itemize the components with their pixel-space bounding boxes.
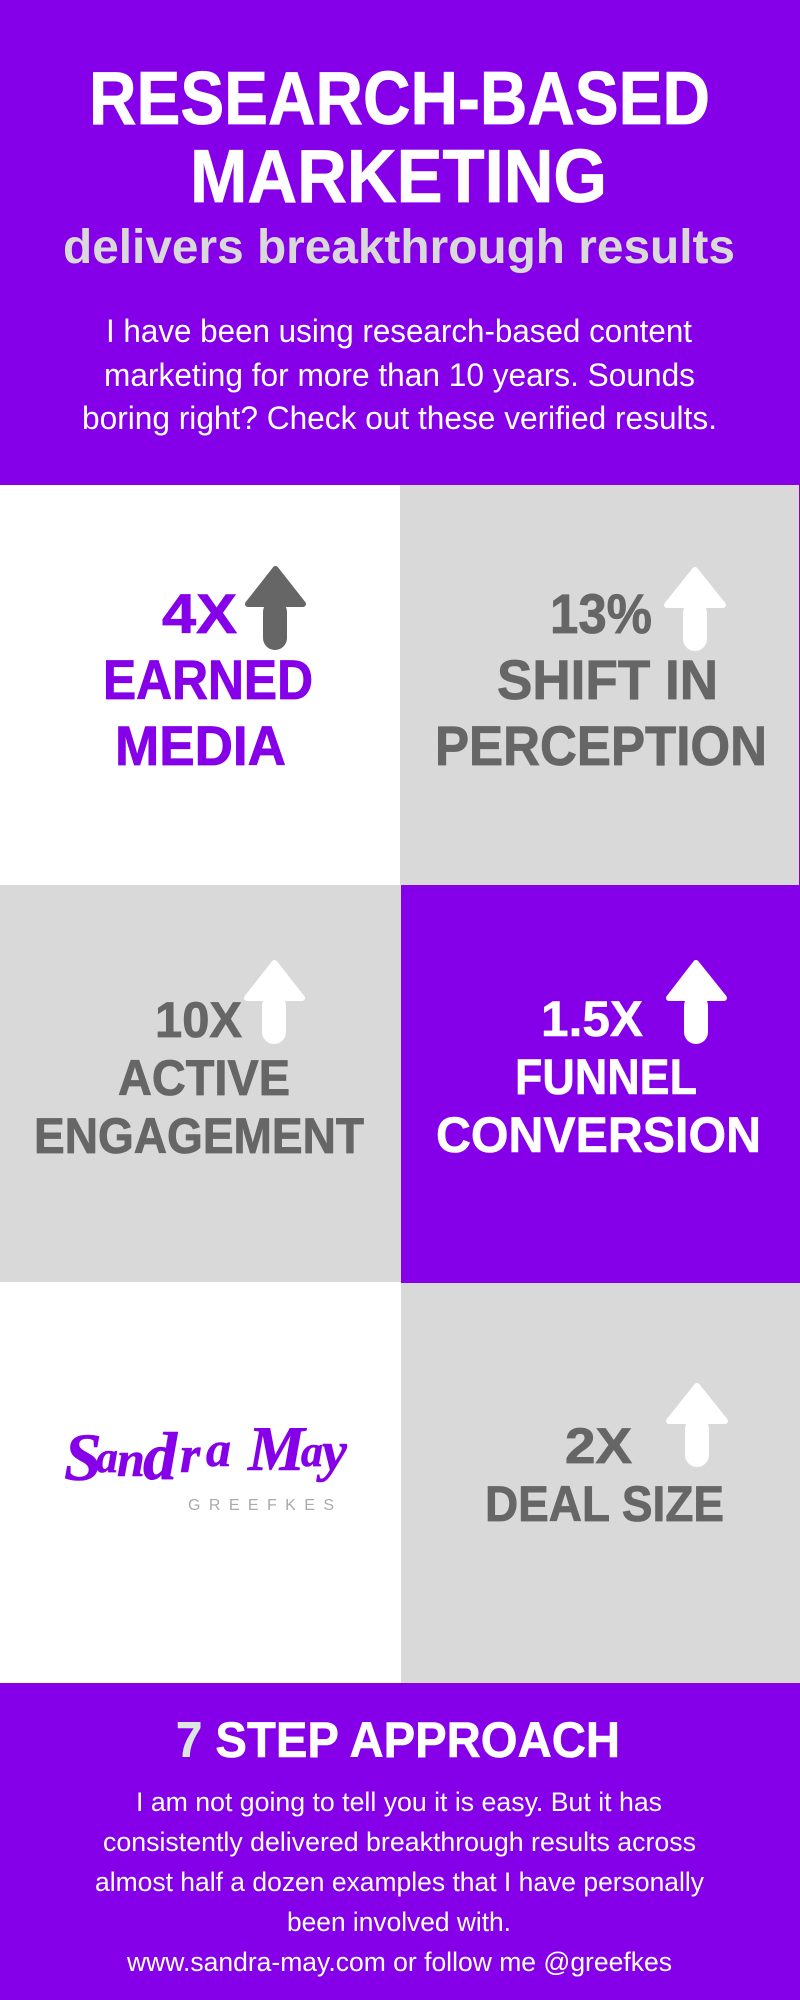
icon: up arrow: [667, 570, 723, 651]
footer paragraph: [95, 1787, 705, 1977]
title: RESEARCH-BASED: [89, 56, 710, 140]
logo: Sandra May script: a: [301, 1427, 323, 1476]
label: active engagement: ACTIVE: [118, 1050, 290, 1106]
label: active engagement: [34, 1050, 364, 1164]
intro paragraph: marketing for more than 10 years. Sounds: [104, 357, 695, 393]
icon: up arrow: [248, 569, 303, 650]
stat: 4X: 4X: [162, 582, 237, 645]
logo: Sandra May script: S: [64, 1419, 102, 1495]
stat: 1.5X: 1.5X: [541, 991, 643, 1047]
intro paragraph: I have been using research-based content: [106, 313, 692, 349]
footer paragraph: almost half a dozen examples that I have personally: [95, 1867, 705, 1897]
footer paragraph: been involved with.: [287, 1907, 511, 1937]
panel: shift in perception: [400, 485, 800, 885]
stat: 2X: 2X: [565, 1418, 632, 1474]
panel: earned media: [0, 485, 400, 885]
logo: Sandra May script: y: [316, 1421, 348, 1483]
logo: Sandra May script: M: [247, 1413, 307, 1484]
footer paragraph: consistently delivered breakthrough results across: [103, 1827, 696, 1857]
stat: 10X: 10X: [155, 992, 242, 1048]
panel: header: [0, 0, 800, 485]
icon: up arrow: [247, 963, 302, 1044]
panel: deal size: [401, 1283, 800, 1683]
panel: footer: [0, 1683, 800, 2000]
panel: active engagement: [0, 885, 401, 1282]
logo: Greefkes wordmark: GREEFKES: [188, 1497, 334, 1514]
intro paragraph: boring right? Check out these verified results.: [82, 400, 717, 436]
subtitle: delivers breakthrough results: [63, 221, 735, 274]
label: shift in perception: [435, 648, 767, 777]
stat: 13%: 13%: [550, 582, 652, 645]
logo: Sandra May script: d: [143, 1418, 178, 1494]
label: active engagement: ENGAGEMENT: [34, 1108, 364, 1164]
label: shift in perception: PERCEPTION: [435, 714, 767, 777]
panel: funnel conversion: [401, 885, 800, 1283]
footer paragraph: I am not going to tell you it is easy. But it has: [136, 1787, 662, 1817]
intro paragraph: [82, 313, 717, 436]
label: earned media: MEDIA: [115, 714, 286, 777]
title: MARKETING: [190, 134, 607, 218]
panel: logo: [0, 1282, 401, 1683]
label: earned media: EARNED: [103, 648, 313, 711]
footer paragraph: www.sandra-may.com or follow me @greefkes: [126, 1947, 672, 1977]
label: funnel conversion: [436, 1049, 761, 1163]
icon: up arrow: [669, 963, 724, 1044]
logo: Sandra May script: n: [117, 1431, 145, 1487]
heading: 7 step approach: 7 STEP APPROACH: [176, 1712, 620, 1768]
title: [89, 56, 710, 218]
logo: Sandra May script: r: [180, 1427, 201, 1484]
label: deal size: DEAL SIZE: [485, 1476, 724, 1532]
label: shift in perception: SHIFT IN: [497, 648, 718, 711]
label: funnel conversion: CONVERSION: [436, 1107, 761, 1163]
label: funnel conversion: FUNNEL: [515, 1049, 697, 1105]
logo: Sandra May script: a: [96, 1433, 118, 1482]
label: earned media: [103, 648, 313, 777]
icon: up arrow: [669, 1386, 725, 1467]
logo: Sandra May script: a: [206, 1421, 231, 1477]
